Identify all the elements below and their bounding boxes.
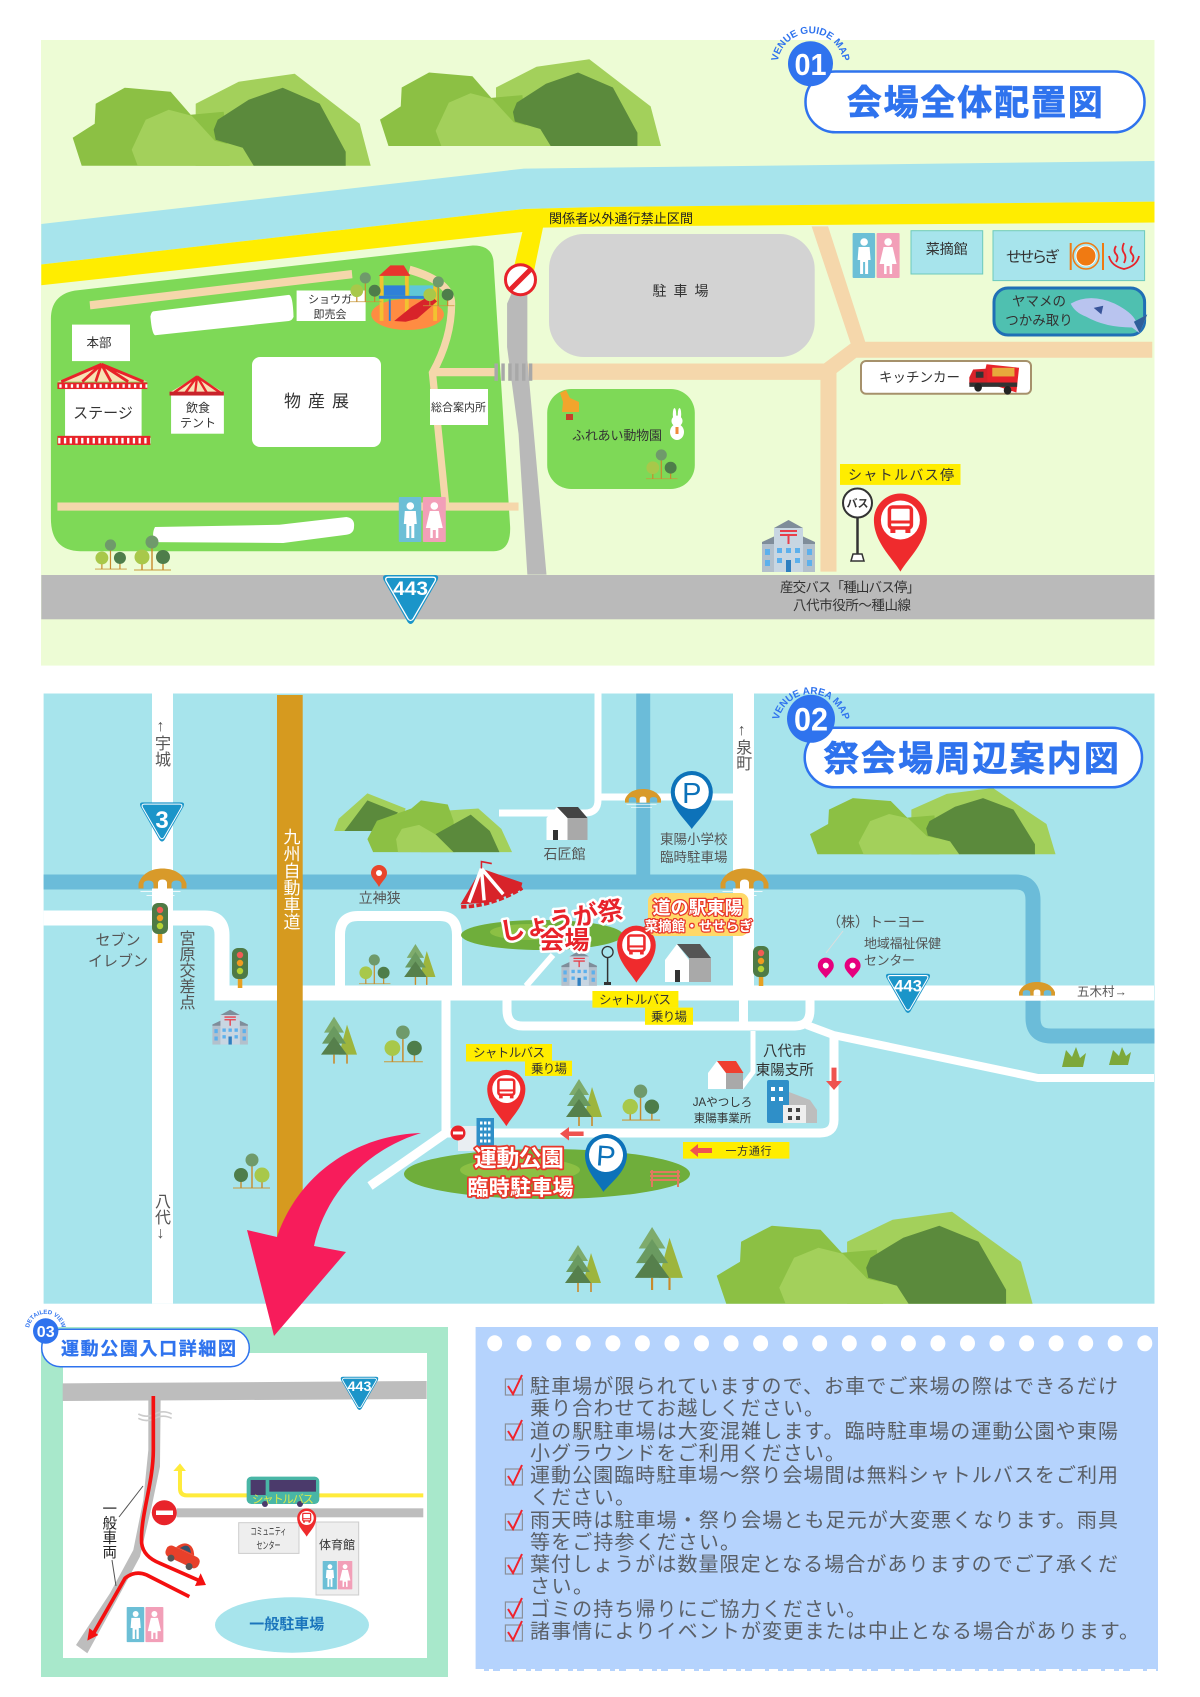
white lots (150, 295, 354, 543)
yamame box: ヤマメの (1012, 294, 1066, 309)
park buildings (458, 1118, 494, 1151)
notes text: 駐車場が限られていますので、お車でご来場の際はできるだけ (530, 1375, 1118, 1398)
festival island (461, 920, 623, 950)
yamame box: つかみ取り (1005, 313, 1073, 328)
sign route 443: 443 (894, 976, 922, 995)
info desk: 総合案内所 (431, 400, 486, 414)
petting zoo (547, 389, 695, 489)
title 01: 会場全体配置図 (847, 84, 1103, 123)
headquarters box: 本部 (86, 336, 112, 350)
food tent (170, 376, 224, 434)
shuttle stop label (840, 464, 960, 485)
sign route 3 (140, 802, 184, 842)
binder holes (487, 1335, 1152, 1351)
expressway: 九州自動車道 (280, 828, 300, 930)
general vehicle label: 一般車両 (100, 1501, 117, 1559)
red routes (87, 1396, 206, 1641)
nazumikan box: 菜摘館 (926, 241, 968, 257)
place labels right: 地域福祉保健 (864, 936, 941, 951)
panel: venue guide map 01 (41, 40, 1154, 666)
hills centre (334, 793, 512, 852)
post offices (212, 951, 597, 1045)
product exhibition: 物産展 (284, 392, 356, 411)
nazumikan box (911, 231, 983, 274)
plate icon (1071, 243, 1103, 270)
panel: venue area map 02 (44, 693, 1155, 1304)
shuttle boarding label centre: シャトルバス (599, 993, 671, 1007)
title 02: 02 (794, 702, 828, 738)
bus stop sign (843, 488, 872, 561)
gymnasium: 体育館 (319, 1537, 355, 1552)
place labels right: 東陽支所 (756, 1062, 814, 1079)
one-way label: 一方通行 (726, 1144, 772, 1158)
roadside station label: 道の駅東陽 (653, 898, 743, 918)
shuttle route yellow (173, 1463, 423, 1495)
hill top right (810, 788, 1056, 854)
title 03: 03 (37, 1324, 55, 1341)
community center: センター (256, 1540, 280, 1552)
place labels right: 東陽小学校 (660, 832, 728, 847)
place labels right: センター (864, 953, 915, 968)
place labels left: ↑宇城 (152, 718, 171, 768)
place labels left: 宮原交差点 (176, 930, 196, 1010)
tan walking paths right (520, 226, 1152, 572)
notes text: 葉付しょうがは数量限定となる場合がありますのでご了承くだ (530, 1553, 1118, 1576)
sign 443 (341, 1377, 378, 1410)
place labels right: 八代市 (763, 1043, 807, 1060)
red bus pin park (487, 1070, 525, 1126)
bridges (138, 789, 1055, 1000)
food tent label: テント (180, 416, 216, 430)
crosswalk (494, 363, 532, 381)
shuttle label on bus: シャトルバス (252, 1493, 314, 1506)
stage label: ステージ (73, 405, 133, 422)
place labels right (660, 722, 1127, 1125)
ginger sale: 即売会 (314, 308, 346, 321)
place labels right: 臨時駐車場 (660, 850, 728, 865)
tan paths in ground (57, 270, 519, 507)
expressway (277, 695, 303, 1240)
title 01 (771, 26, 1146, 134)
rivers (44, 694, 1155, 1036)
toilets ground (399, 497, 446, 542)
place labels right: JAやつしろ (693, 1096, 752, 1109)
house station (665, 944, 711, 982)
restricted section label: 関係者以外通行禁止区間 (549, 211, 693, 226)
notes text: ください。 (530, 1487, 635, 1509)
place labels left: イレブン (88, 952, 148, 970)
roads (63, 1381, 427, 1653)
no entry (152, 1500, 177, 1525)
community center: コミュニティ (250, 1527, 286, 1538)
pine and deciduous trees (233, 944, 683, 1292)
notes text: 雨天時は駐車場・祭り会場とも足元が大変悪くなります。雨具 (530, 1509, 1118, 1532)
restricted road (41, 202, 1154, 285)
seseragi box (993, 231, 1145, 281)
place labels right: ↑泉町 (733, 722, 752, 771)
red car (162, 1537, 205, 1573)
festival name: しょうが祭 (497, 894, 626, 947)
trees in zoo (646, 449, 677, 479)
one-way label (683, 1142, 789, 1159)
community center (239, 1523, 299, 1553)
title 03: DETAILED VIEW (25, 1310, 66, 1328)
tatejinkyo pin (371, 865, 387, 887)
road 443 (41, 575, 1154, 619)
big pink arrow (247, 1133, 421, 1336)
P pin park (582, 1133, 628, 1193)
river (41, 161, 1154, 264)
shuttle stop label: シャトルバス停 (848, 467, 954, 483)
petting zoo: ふれあい動物園 (572, 428, 662, 443)
sign route 443 (886, 974, 930, 1013)
shuttle boarding label left: 乗り場 (531, 1062, 567, 1076)
bus stop small (602, 946, 613, 985)
title 01: VENUE GUIDE MAP (771, 26, 850, 60)
gray road vertical (507, 286, 546, 575)
sign 443 (383, 575, 438, 624)
white roads (44, 693, 1154, 1304)
notes text: さい。 (530, 1576, 593, 1598)
ginger sale: ショウガ (308, 293, 352, 306)
no entry sign (506, 265, 536, 295)
small road arrows (560, 1068, 842, 1140)
sign 443: 443 (348, 1379, 371, 1395)
park name: 運動公園 (474, 1145, 564, 1171)
pink pins (818, 958, 861, 978)
pin (297, 1508, 316, 1537)
place labels left: 石匠館 (544, 846, 586, 862)
notes text (530, 1375, 1139, 1643)
seseragi box: せせらぎ (1006, 248, 1060, 266)
bus line label: 八代市役所～種山線 (793, 598, 912, 613)
place labels left: 立神狭 (359, 890, 401, 906)
shuttle boarding label left: シャトルバス (473, 1046, 545, 1060)
panel: notes (475, 1327, 1158, 1671)
title 02: VENUE AREA MAP (772, 687, 850, 719)
traffic lights (152, 903, 769, 988)
yamame box (994, 288, 1145, 335)
shuttle boarding label centre: 乗り場 (651, 1010, 687, 1024)
shuttle boarding label left (466, 1044, 572, 1076)
city hall buildings (767, 1080, 817, 1123)
notes text: 道の駅駐車場は大変混雑します。臨時駐車場の運動公園や東陽 (530, 1420, 1118, 1443)
food tent label: 飲食 (186, 400, 210, 415)
title 03: 運動公園入口詳細図 (61, 1339, 236, 1359)
ginger sale (297, 290, 366, 321)
title 03 (25, 1310, 250, 1368)
food truck (969, 364, 1019, 395)
shuttle boarding label centre (592, 991, 693, 1025)
notes text: 運動公園臨時駐車場～祭り会場間は無料シャトルバスをご利用 (530, 1464, 1118, 1487)
general parking: 一般駐車場 (249, 1615, 324, 1633)
place labels right: 東陽事業所 (694, 1111, 752, 1125)
title 02: 祭会場周辺案内図 (824, 740, 1119, 779)
roadside station label (645, 893, 753, 936)
event ground (51, 245, 510, 551)
hill left (73, 74, 371, 166)
notes text: 等をご持参ください。 (530, 1531, 740, 1554)
general parking (215, 1597, 369, 1653)
kitchen car box: キッチンカー (879, 370, 960, 385)
panel: detailed view 03 (41, 1327, 448, 1677)
shuttle bus (247, 1477, 319, 1507)
playground (371, 265, 444, 330)
stage tent (57, 364, 150, 445)
trees near playground right (423, 276, 454, 306)
product exhibition (252, 357, 381, 447)
headquarters box (72, 325, 130, 361)
sign 443: 443 (393, 579, 428, 600)
bench (650, 1170, 680, 1187)
fish icon (1071, 298, 1147, 333)
place labels left: 八代↓ (152, 1193, 171, 1242)
notes text: 小グラウンドをご利用ください。 (530, 1442, 845, 1465)
roadside station label: 菜摘館・せせらぎ (645, 918, 753, 934)
kitchen car box (861, 361, 1031, 394)
trees bottom second (134, 536, 171, 570)
post office (762, 520, 815, 572)
toilets right (853, 233, 900, 278)
bus line label: 産交バス「種山バス停」 (780, 580, 920, 595)
parking (549, 234, 815, 357)
hill bottom right (717, 1212, 1033, 1304)
trees bottom left (95, 539, 127, 569)
notes text: ゴミの持ち帰りにご協力ください。 (530, 1598, 866, 1621)
torn bottom edge (475, 1669, 1158, 1673)
place labels left (88, 718, 586, 1242)
red bus pin (874, 494, 927, 572)
hot spring icon (1109, 243, 1139, 269)
general vehicle label (100, 1486, 143, 1586)
temp parking name: 臨時駐車場 (468, 1177, 574, 1200)
checkboxes (505, 1375, 522, 1641)
trees near playground left (350, 272, 381, 302)
gymnasium (316, 1522, 359, 1595)
parking: 駐車場 (652, 283, 716, 299)
notes text: 乗り合わせてお越しください。 (530, 1397, 824, 1420)
place labels right: （株）トーヨー (827, 914, 925, 930)
festival venue word: 会場 (539, 927, 590, 955)
no entry small (450, 1126, 466, 1140)
toilet outside (127, 1607, 163, 1642)
bushes (1062, 1047, 1131, 1067)
title 02 (772, 687, 1144, 788)
P pin school: P (682, 778, 701, 810)
giraffe toy (560, 390, 579, 420)
notes text: 諸事情によりイベントが変更または中止となる場合があります。 (530, 1620, 1139, 1643)
stone house (546, 807, 588, 840)
info desk (430, 389, 488, 425)
place labels right: 五木村→ (1077, 985, 1127, 999)
red bus pin festival (617, 926, 656, 983)
title 01: 01 (794, 47, 826, 82)
sign route 3: 3 (155, 807, 169, 834)
toilet in gym (323, 1561, 352, 1589)
rabbit (670, 408, 684, 440)
P pin park: P (595, 1140, 617, 1174)
bus stop sign: バス (846, 497, 868, 510)
JA house (708, 1061, 744, 1089)
P pin school (671, 771, 713, 829)
festival tent (460, 862, 522, 907)
park island (404, 1149, 690, 1199)
place labels left: セブン (95, 931, 141, 949)
hill right (380, 59, 661, 146)
